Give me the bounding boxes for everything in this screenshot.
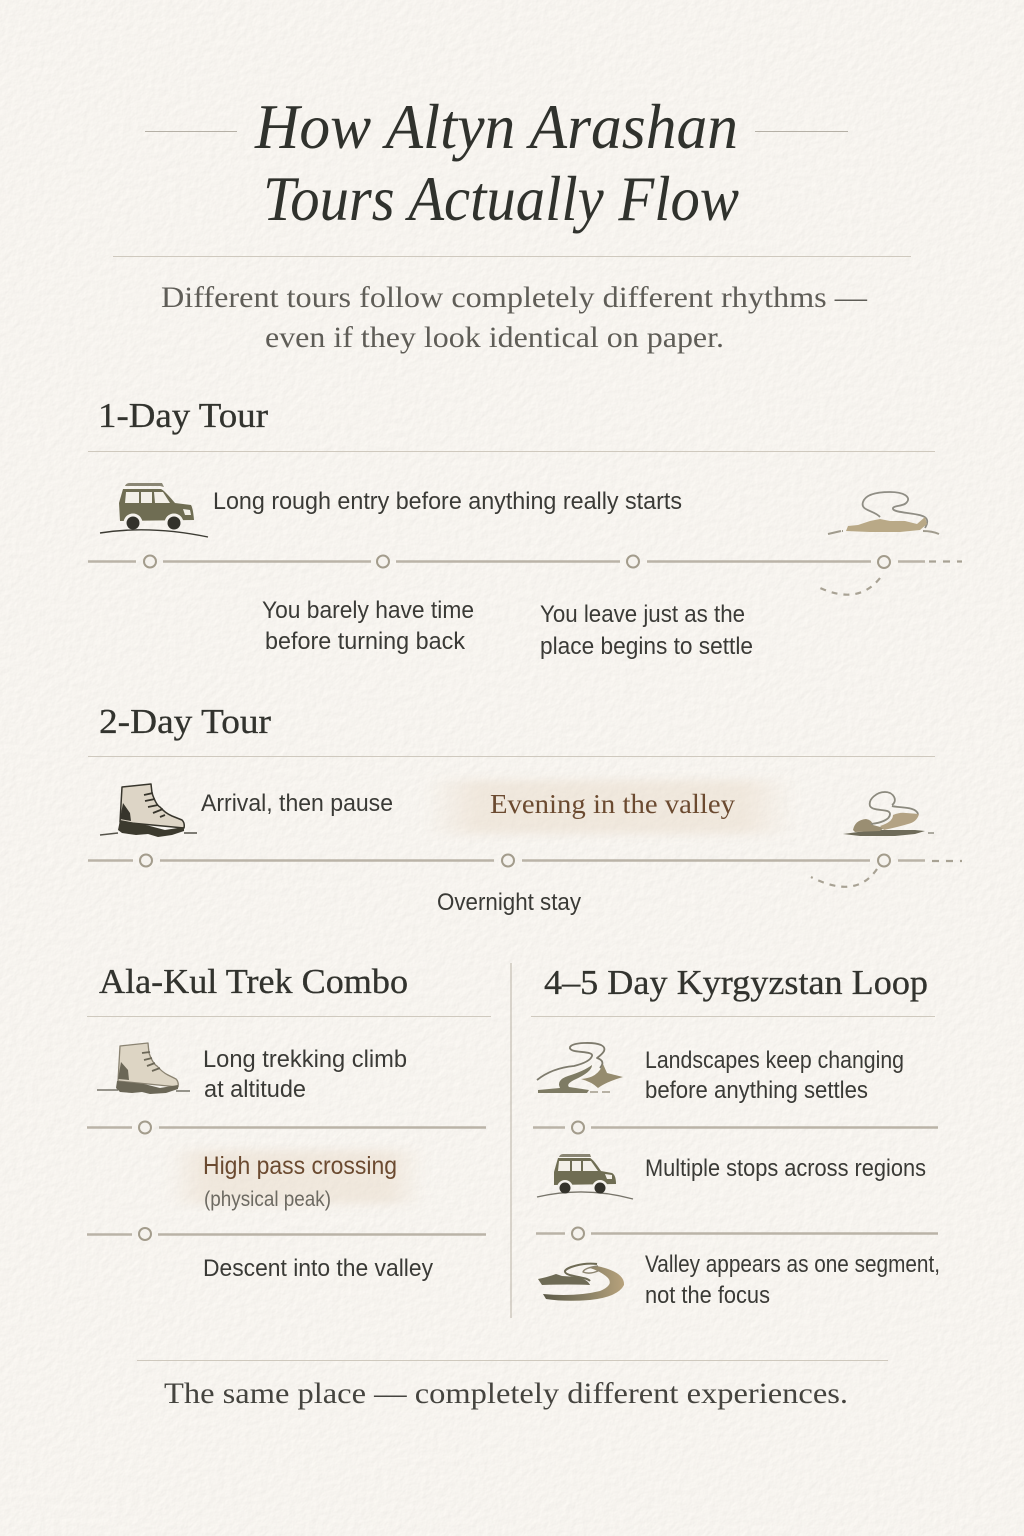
- subtitle: Different tours follow completely different rhythms —: [161, 281, 868, 314]
- timeline node: [533, 1122, 938, 1134]
- timeline: [88, 854, 962, 887]
- callout: high pass crossing: High pass crossing: [203, 1152, 397, 1180]
- subtitle: [161, 281, 868, 354]
- callout: evening in the valley: Evening in the valley: [490, 789, 736, 819]
- text: valley appears: Valley appears as one segment,: [645, 1251, 940, 1278]
- text: long trekking climb: at altitude: [204, 1076, 306, 1103]
- icon: valley river: [843, 792, 934, 836]
- text: valley appears: [645, 1251, 940, 1309]
- text: valley appears: not the focus: [645, 1282, 770, 1309]
- text: descent: Descent into the valley: [203, 1255, 433, 1282]
- text: landscapes keep changing: before anything settles: [645, 1077, 868, 1104]
- icon: valley road: [538, 1264, 624, 1301]
- panel: 4-5 day kyrgyzstan loop: [531, 963, 940, 1309]
- callout: evening in the valley: [425, 780, 795, 834]
- text: long trekking climb: Long trekking climb: [203, 1046, 407, 1073]
- text: barely have time: before turning back: [265, 628, 466, 655]
- closing line: The same place — completely different experiences.: [164, 1377, 848, 1410]
- heading: 1-day tour: 1-Day Tour: [98, 396, 268, 435]
- text: long rough entry: Long rough entry before anything really starts: [213, 488, 682, 515]
- divider between lower panels: [510, 963, 512, 1318]
- callout: high pass crossing: [168, 1150, 424, 1211]
- icon: boot: [97, 1043, 190, 1094]
- panel: 2-day tour: [88, 702, 962, 916]
- icon: boot: [100, 784, 197, 837]
- text: leave as place settles: [540, 601, 753, 660]
- timeline: [88, 556, 962, 595]
- heading: ala-kul trek combo: Ala-Kul Trek Combo: [99, 962, 408, 1001]
- panel: ala-kul trek combo: [87, 962, 491, 1282]
- icon: jeep: [537, 1154, 633, 1199]
- callout: high pass crossing: (physical peak): [204, 1188, 331, 1211]
- subtitle: even if they look identical on paper.: [265, 321, 724, 354]
- text: arrival then pause: Arrival, then pause: [201, 790, 393, 817]
- text: long trekking climb: [203, 1046, 407, 1103]
- text: overnight stay: Overnight stay: [437, 889, 581, 916]
- text: barely have time: You barely have time: [262, 597, 474, 624]
- text: multiple stops: Multiple stops across regions: [645, 1155, 926, 1182]
- icon: jeep: [100, 483, 208, 537]
- title: How Altyn Arashan: [254, 92, 738, 162]
- text: landscapes keep changing: Landscapes keep changing: [645, 1047, 904, 1074]
- text: leave as place settles: You leave just as the: [540, 601, 745, 628]
- timeline node: [87, 1228, 486, 1240]
- text: barely have time: [262, 597, 474, 655]
- text: landscapes keep changing: [645, 1047, 904, 1104]
- title: [145, 92, 848, 234]
- timeline node: [536, 1228, 938, 1240]
- panel: 1-day tour: [88, 396, 962, 660]
- heading: kyrgyzstan loop: 4–5 Day Kyrgyzstan Loop: [544, 963, 928, 1002]
- icon: valley river: [828, 492, 939, 534]
- icon: winding road: [537, 1043, 623, 1093]
- timeline node: [87, 1122, 486, 1134]
- title: Tours Actually Flow: [263, 164, 739, 234]
- text: leave as place settles: place begins to settle: [540, 633, 753, 660]
- heading: 2-day tour: 2-Day Tour: [99, 702, 271, 741]
